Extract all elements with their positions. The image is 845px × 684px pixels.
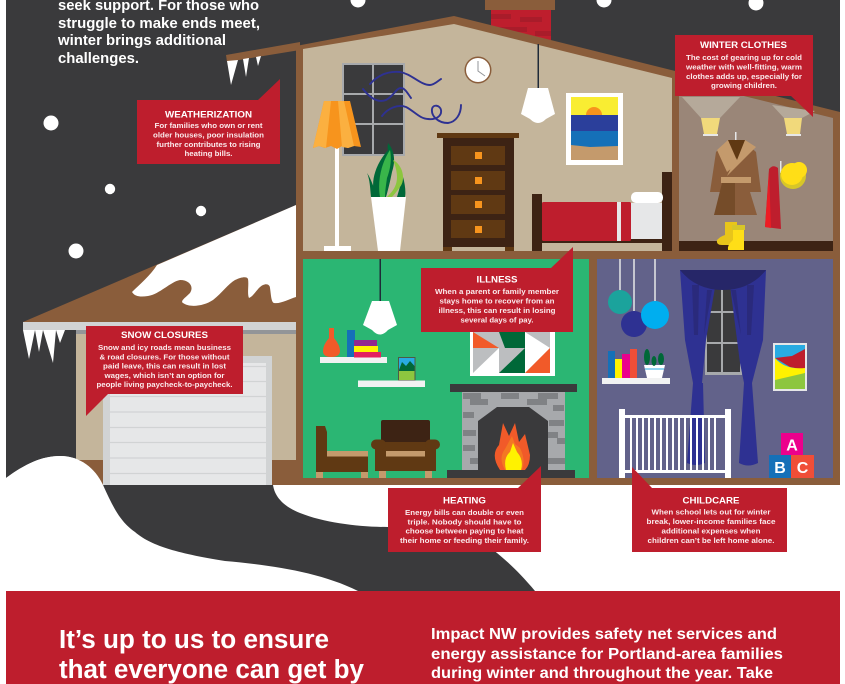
callout: winter clothes: WINTER CLOTHES	[700, 40, 787, 50]
callout: winter clothes: clothes adds up, especially for	[686, 72, 802, 81]
garage roof	[23, 205, 296, 322]
floor lamp	[313, 101, 361, 251]
room: living room	[303, 259, 589, 478]
alphabet blocks: B	[774, 460, 786, 477]
house shell	[296, 16, 840, 485]
bed	[532, 172, 672, 251]
upper shelf	[320, 328, 387, 363]
banner headline: It’s up to us to ensure	[59, 626, 329, 654]
fire	[495, 423, 530, 470]
coat	[710, 132, 761, 215]
callout: snow closures: paid leave, this can result in lost	[103, 362, 226, 370]
drafts	[363, 72, 461, 123]
callout: snow closures: & road closures. For those without	[100, 352, 230, 362]
boots	[717, 222, 745, 250]
intro text: challenges.	[58, 51, 139, 67]
callout: illness: When a parent or family member	[435, 287, 559, 296]
callout: childcare	[632, 467, 787, 552]
bottom banner	[6, 591, 840, 684]
potted plant	[367, 143, 406, 251]
chimney	[485, 0, 555, 42]
living room wall	[303, 259, 589, 478]
room: bedroom	[303, 24, 672, 251]
room: closet	[679, 80, 833, 251]
banner body text	[431, 626, 783, 682]
callout: childcare: additional expenses when	[662, 526, 761, 536]
lower shelf	[358, 357, 425, 387]
nursery wall	[597, 259, 833, 478]
banner headline: that everyone can get by	[59, 656, 365, 684]
banner headline	[59, 626, 365, 684]
banner body text: Impact NW provides safety net services and	[431, 626, 777, 643]
snow mound	[6, 456, 110, 510]
callout: illness: several days of pay.	[460, 316, 534, 324]
callout: winter clothes: weather with well-fitting, warm	[685, 62, 802, 72]
callout: heating: their home or feeding their family.	[400, 536, 529, 545]
callout: snow closures	[86, 326, 243, 416]
banner body text: energy assistance for Portland-area families	[431, 646, 783, 663]
nursery shelf	[602, 349, 670, 384]
fireplace	[447, 384, 577, 478]
callout: heating: triple. Nobody should have to	[408, 518, 522, 526]
intro text: struggle to make ends meet,	[58, 16, 260, 32]
callout: weatherization: For families who own or rent	[154, 121, 263, 130]
closet floor	[679, 241, 833, 251]
armchair	[371, 420, 440, 478]
callout: weatherization: older houses, poor insulation	[153, 130, 264, 140]
callout: weatherization: heating bills.	[184, 149, 232, 158]
garage wall	[76, 334, 296, 485]
intro text: winter brings additional	[57, 33, 226, 49]
callout: weatherization	[137, 79, 280, 164]
abstract picture	[773, 343, 807, 391]
yellow hat	[780, 162, 807, 189]
callout: weatherization: further contributes to rising	[156, 140, 261, 149]
alphabet blocks: C	[797, 460, 809, 477]
crib	[619, 409, 731, 478]
curtains	[680, 270, 766, 466]
gutter	[23, 322, 296, 334]
callout: winter clothes	[675, 35, 813, 117]
alphabet blocks	[769, 433, 814, 478]
closet wall	[679, 80, 833, 241]
callout: winter clothes: growing children.	[711, 81, 777, 90]
snowflakes	[44, 0, 764, 258]
pendant lamp	[521, 44, 555, 123]
dresser	[437, 133, 519, 251]
living room pendant lamp	[363, 259, 397, 334]
scarf	[765, 161, 782, 229]
snow on garage roof	[132, 205, 296, 306]
banner body text: during winter and throughout the year. Take	[431, 665, 773, 682]
callout: heating: Energy bills can double or even	[405, 508, 524, 517]
clock	[464, 56, 492, 84]
intro text	[57, 0, 260, 67]
nursery window	[705, 288, 742, 375]
mobile	[608, 259, 669, 337]
callout: winter clothes: The cost of gearing up for cold	[686, 53, 802, 62]
roof icicles	[227, 56, 261, 85]
callout: snow closures: people living paycheck-to-paycheck.	[96, 380, 232, 389]
callout: illness	[421, 247, 573, 332]
callout: illness: illness, this can result in losing	[438, 306, 556, 315]
garage icicles	[23, 330, 65, 363]
room: nursery	[597, 259, 833, 478]
roof eave	[226, 42, 300, 62]
side chair	[316, 426, 368, 478]
callout: illness: stays home to recover from an	[440, 296, 555, 306]
garage door	[103, 356, 272, 485]
callout: snow closures: wages, which isn’t an option for	[103, 371, 225, 380]
snowy ground and road	[6, 456, 840, 591]
callout: heating: HEATING	[443, 496, 486, 506]
callout: childcare: break, lower-income families face	[646, 517, 776, 526]
callout: snow closures: SNOW CLOSURES	[121, 330, 208, 340]
closet lights	[682, 97, 815, 136]
callout: childcare: children can’t be left home alone.	[648, 536, 774, 545]
window	[342, 63, 405, 156]
callout: snow closures: Snow and icy roads mean business	[98, 343, 231, 352]
alphabet blocks: A	[786, 438, 798, 454]
beach picture	[566, 93, 623, 165]
geometric art	[470, 328, 555, 376]
callout: childcare: When school lets out for winter	[652, 508, 771, 516]
callout: illness: ILLNESS	[476, 274, 518, 284]
callout: weatherization: WEATHERIZATION	[165, 110, 252, 120]
callout: heating: choose between paying to heat	[406, 526, 524, 536]
bedroom wall	[303, 24, 672, 251]
callout: childcare: CHILDCARE	[682, 496, 740, 506]
callout: heating	[388, 466, 541, 552]
garage	[23, 205, 296, 485]
